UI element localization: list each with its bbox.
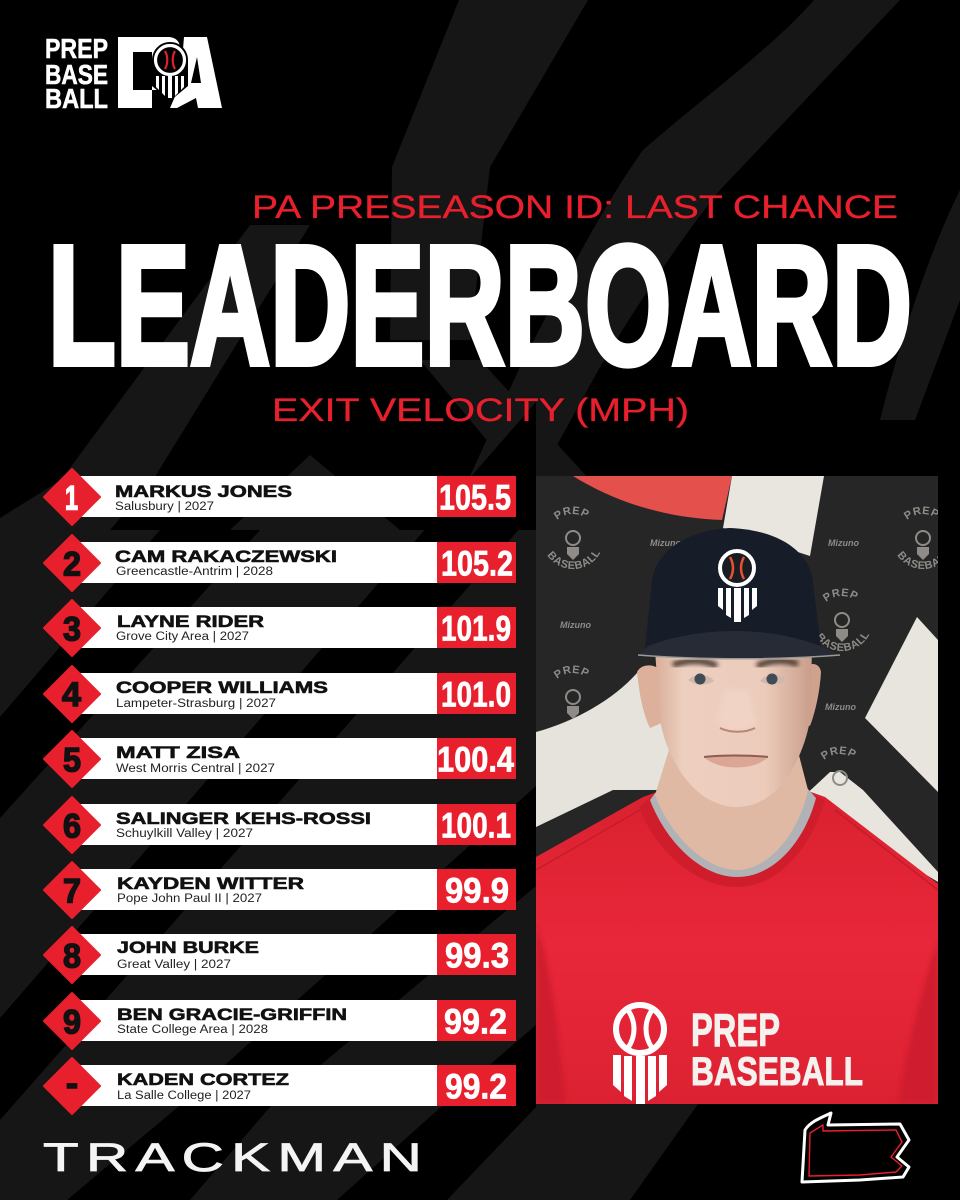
cap logo [718, 551, 757, 622]
row 4: Cooper Williams [44, 666, 516, 722]
row 7: Kayden Witter: KAYDEN WITTER [117, 874, 304, 893]
row 9: Ben Gracie-Griffin: 99.2 [444, 1002, 507, 1042]
row 6: Salinger Kehs-Rossi: 6 [63, 808, 81, 846]
row 8: John Burke: Great Valley | 2027 [117, 959, 231, 971]
shirt wordmark [691, 1004, 863, 1094]
row 8: John Burke [44, 927, 516, 983]
row 3: Layne Rider: LAYNE RIDER [117, 612, 264, 631]
row 10: Kaden Cortez: 99.2 [445, 1068, 507, 1106]
row 9: Ben Gracie-Griffin: 9 [63, 1004, 81, 1042]
backdrop logos: Prep Baseball: PREP [904, 506, 938, 520]
row 2: Cam Rakaczewski: CAM RAKACZEWSKI [115, 547, 337, 566]
subtitle: event name: PA PRESEASON ID: LAST CHANCE [252, 189, 898, 225]
row 10: Kaden Cortez: - [66, 1065, 78, 1103]
backdrop logos: Prep Baseball: Mizuno [828, 538, 859, 548]
row 2: Cam Rakaczewski: 105.2 [441, 544, 513, 584]
logo wordmark: Prep Base Ball [45, 33, 108, 114]
photo backdrop [536, 476, 938, 1104]
shirt wordmark: PREP [691, 1004, 780, 1056]
row 2: Cam Rakaczewski: Greencastle-Antrim | 2028 [116, 566, 273, 578]
row 6: Salinger Kehs-Rossi: SALINGER KEHS-ROSSI [116, 809, 371, 828]
logo: Prep Baseball PA [45, 33, 222, 114]
subtitle: metric: EXIT VELOCITY (MPH) [272, 392, 689, 428]
backdrop logos: Prep Baseball: Mizuno [650, 538, 681, 548]
shirt logo [613, 1005, 667, 1104]
row 6: Salinger Kehs-Rossi: 100.1 [441, 806, 511, 846]
logo wordmark: Prep Base Ball: PREP [45, 33, 108, 64]
backdrop logos: Prep Baseball [548, 506, 938, 786]
row 8: John Burke: 8 [63, 938, 81, 976]
baseball cap [638, 528, 840, 659]
row 1: Markus Jones: 105.5 [439, 478, 511, 518]
leaderboard list [44, 469, 516, 1114]
logo wordmark: Prep Base Ball: BALL [45, 83, 108, 114]
row 4: Cooper Williams: COOPER WILLIAMS [116, 678, 328, 697]
row 9: Ben Gracie-Griffin: State College Area | 2028 [117, 1024, 268, 1036]
backdrop logos: Prep Baseball: PREP [822, 588, 858, 602]
backdrop logos: Prep Baseball: PREP [554, 665, 589, 678]
backdrop logos: Prep Baseball: Mizuno [825, 702, 856, 712]
icon: Pennsylvania outline [802, 1113, 909, 1182]
row 6: Salinger Kehs-Rossi [44, 797, 516, 853]
backdrop logos: Prep Baseball: BASEBALL [820, 633, 870, 652]
row 7: Kayden Witter: 99.9 [445, 872, 509, 910]
row 9: Ben Gracie-Griffin: BEN GRACIE-GRIFFIN [117, 1005, 347, 1024]
row 2: Cam Rakaczewski [44, 535, 516, 591]
row 1: Markus Jones: Salusbury | 2027 [115, 501, 214, 513]
row 5: Matt Zisa: West Morris Central | 2027 [116, 763, 275, 775]
row 10: Kaden Cortez: KADEN CORTEZ [117, 1070, 289, 1089]
row 5: Matt Zisa: 5 [63, 742, 81, 780]
backdrop logos: Prep Baseball: BASEBALL [898, 551, 938, 570]
row 5: Matt Zisa [44, 731, 516, 787]
row 3: Layne Rider: 3 [63, 610, 81, 648]
backdrop logos: Prep Baseball: PREP [820, 746, 856, 760]
logo wordmark: Prep Base Ball: BASE [45, 59, 108, 90]
row 1: Markus Jones: MARKUS JONES [115, 482, 292, 501]
row 7: Kayden Witter: Pope John Paul II | 2027 [117, 893, 262, 905]
logo icon: baseball shield [152, 42, 188, 101]
row 4: Cooper Williams: Lampeter-Strasburg | 2027 [116, 698, 276, 710]
row 3: Layne Rider: 101.9 [441, 610, 511, 648]
backdrop logos: Prep Baseball: BASEBALL [548, 551, 600, 570]
row 3: Layne Rider: Grove City Area | 2027 [116, 631, 249, 643]
row 8: John Burke: JOHN BURKE [117, 938, 259, 957]
row 7: Kayden Witter [44, 862, 516, 918]
row 3: Layne Rider [44, 600, 516, 656]
row 5: Matt Zisa: 100.4 [437, 740, 514, 780]
sponsor logo: Trackman: TRACKMAN [43, 1135, 429, 1180]
row 4: Cooper Williams: 4 [62, 676, 81, 714]
row 9: Ben Gracie-Griffin [44, 993, 516, 1049]
row 2: Cam Rakaczewski: 2 [63, 546, 81, 584]
row 1: Markus Jones: 1 [65, 480, 78, 518]
row 6: Salinger Kehs-Rossi: Schuylkill Valley | 2027 [116, 828, 253, 840]
red shirt [536, 787, 938, 1104]
logo letters: PA [118, 37, 180, 108]
row 8: John Burke: 99.3 [445, 936, 509, 976]
shirt collar and neck [639, 740, 825, 887]
row 1: Markus Jones [44, 469, 516, 525]
row 7: Kayden Witter: 7 [63, 872, 81, 910]
shirt wordmark: BASEBALL [691, 1050, 863, 1094]
row 5: Matt Zisa: MATT ZISA [116, 743, 240, 762]
backdrop logos: Prep Baseball: PREP [554, 506, 589, 520]
row 4: Cooper Williams: 101.0 [441, 676, 511, 714]
player face [637, 650, 821, 807]
row 10: Kaden Cortez [44, 1058, 516, 1114]
panel: player photo [536, 476, 938, 1104]
row 10: Kaden Cortez: La Salle College | 2027 [117, 1090, 251, 1102]
backdrop logos: Prep Baseball: Mizuno [560, 620, 591, 630]
